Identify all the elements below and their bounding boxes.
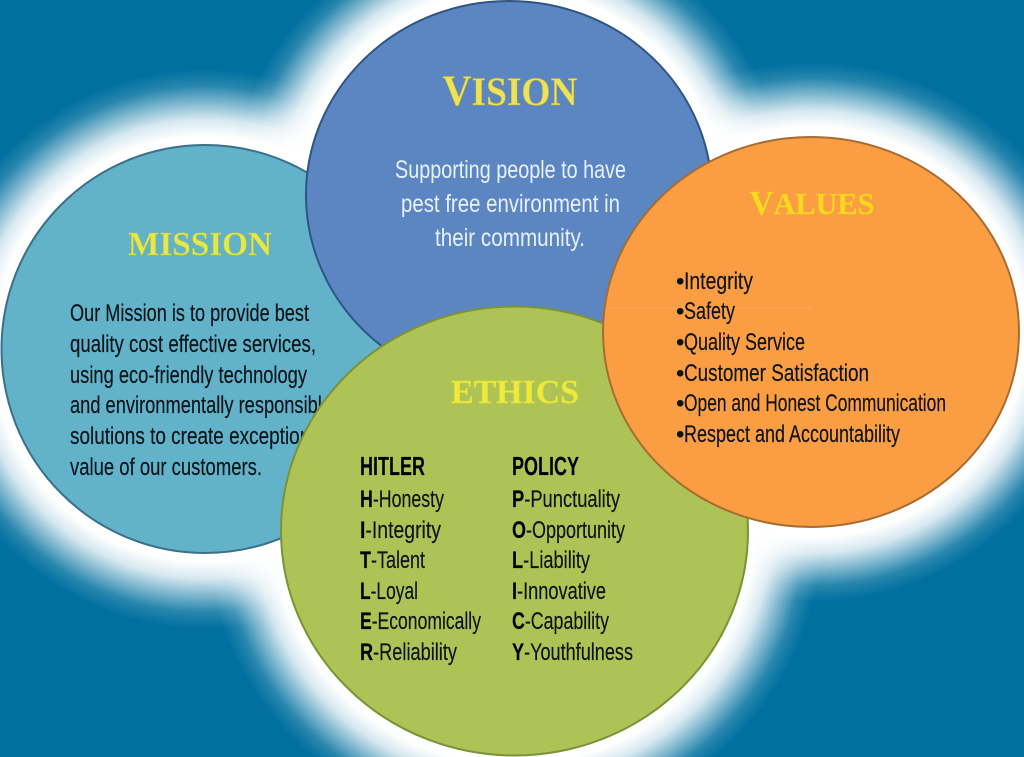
text block: policy acronym: POLICY (512, 451, 579, 481)
text block: mission statement: using eco-friendly technology (70, 362, 307, 389)
text block: hitler acronym (360, 451, 481, 666)
text block: values list: • (676, 329, 684, 356)
text block: hitler acronym: E-Economically (360, 608, 481, 635)
text block: values list: • (676, 390, 684, 417)
text block: policy acronym: P-Punctuality (512, 486, 620, 513)
text block: values list: • (676, 360, 684, 387)
text block: policy acronym (512, 451, 633, 666)
text block: values list: Safety (684, 298, 735, 325)
text block: values list: Quality Service (684, 329, 805, 356)
text block: mission statement: Our Mission is to provide best (70, 300, 309, 327)
text block: policy acronym: O-Opportunity (512, 517, 625, 544)
text block: hitler acronym: R-Reliability (360, 639, 457, 666)
text block: policy acronym: I-Innovative (512, 578, 606, 605)
panel: ethics (281, 306, 748, 756)
text block: vision statement (395, 156, 626, 252)
text block: vision statement: their community. (435, 224, 585, 252)
panel: values (603, 137, 1019, 527)
text block: values list: • (676, 268, 684, 295)
text block: hitler acronym: H-Honesty (360, 486, 444, 513)
text block: mission statement: quality cost effective services, (70, 331, 316, 358)
text block: values list: Integrity (684, 268, 753, 295)
text block: vision statement: pest free environment in (401, 190, 620, 218)
text block: hitler acronym: HITLER (360, 451, 425, 481)
text block: values list: Respect and Accountability (684, 421, 900, 448)
panel: mission (2, 145, 408, 553)
text block: mission statement: solutions to create exceptional (70, 423, 325, 450)
text block: mission statement: and environmentally responsible (70, 392, 332, 419)
text block: values list: • (676, 421, 684, 448)
panel: vision (306, 1, 712, 389)
heading: vision: VISION (442, 68, 578, 115)
text block: policy acronym: C-Capability (512, 608, 609, 635)
text block: mission statement (70, 300, 332, 481)
text block: policy acronym: L-Liability (512, 547, 590, 574)
heading: ethics: ETHICS (451, 374, 579, 411)
text block: hitler acronym: I-Integrity (360, 517, 441, 544)
text block: values list (676, 268, 946, 448)
text block: hitler acronym: T-Talent (360, 547, 425, 574)
text block: vision statement: Supporting people to have (395, 156, 626, 184)
text block: mission statement: value of our customers. (70, 454, 262, 481)
heading: values: VALUES (750, 185, 874, 222)
text block: hitler acronym: L-Loyal (360, 578, 418, 605)
heading: mission: MISSION (128, 226, 272, 263)
text block: values list: Customer Satisfaction (684, 360, 869, 387)
text block: values list: • (676, 298, 684, 325)
text block: policy acronym: Y-Youthfulness (512, 639, 633, 666)
